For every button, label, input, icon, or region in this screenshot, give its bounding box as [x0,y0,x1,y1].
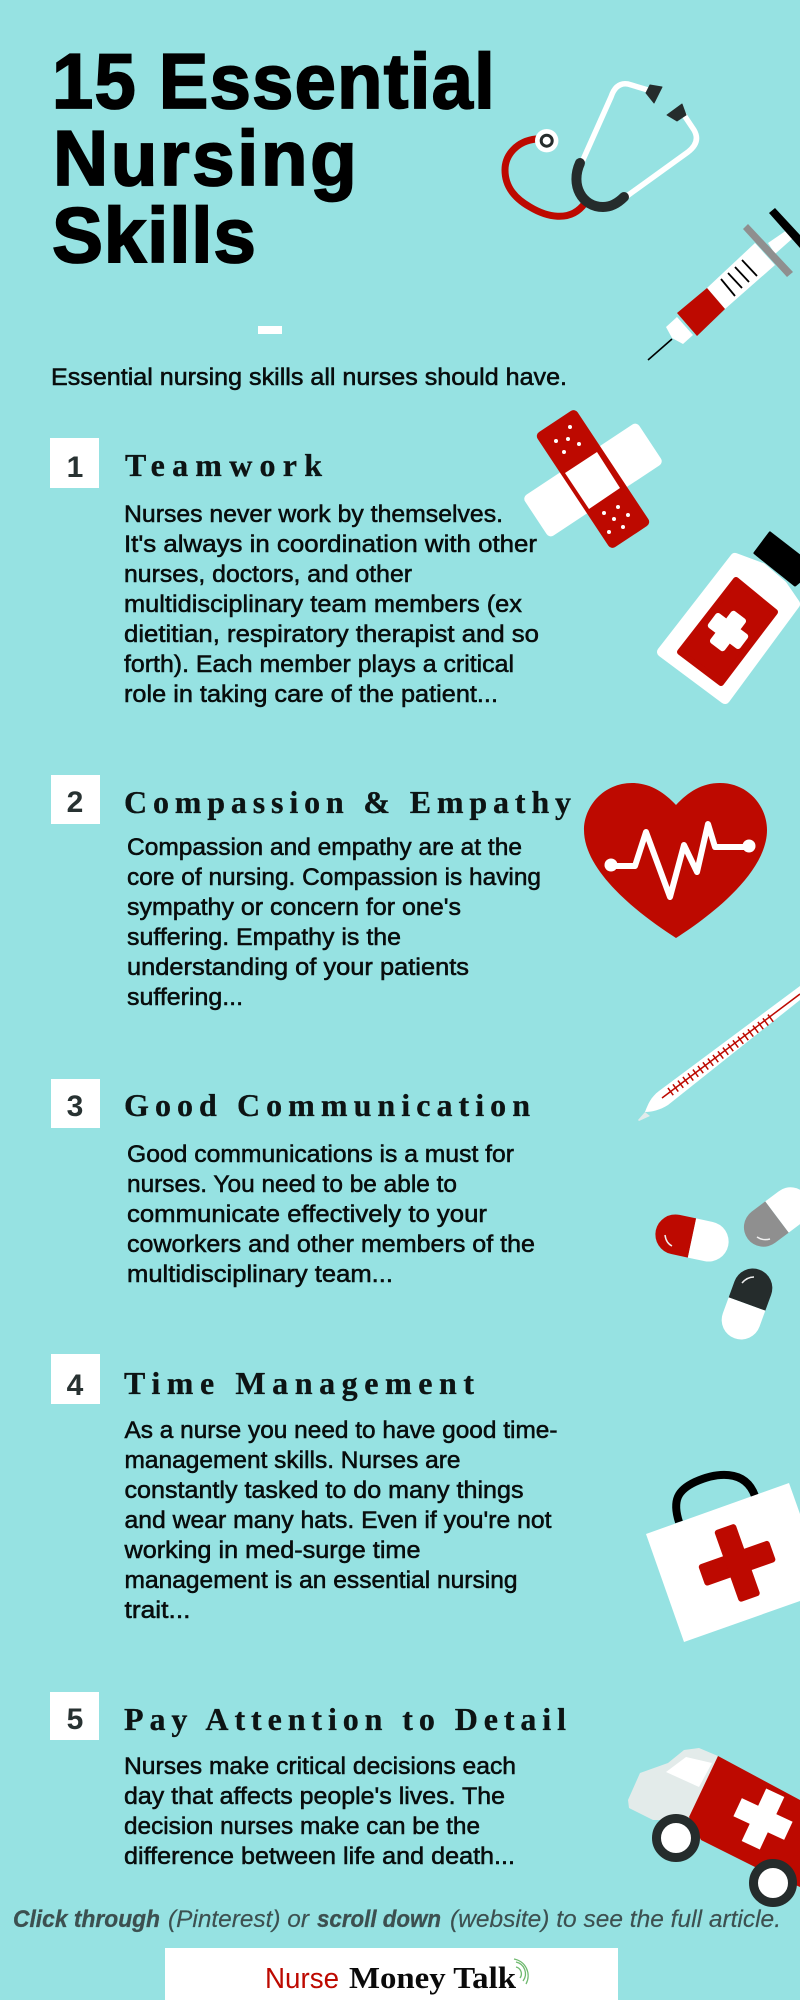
body 2: understanding of your patients [127,954,469,981]
call to action: scroll down [317,1906,441,1933]
body 1 [124,501,539,708]
body 3: nurses. You need to be able to [127,1171,457,1198]
icon: pills [652,1179,800,1345]
body 1: role in taking care of the patient... [124,681,498,708]
icon: heart with pulse [584,783,767,938]
number box 5 [50,1692,99,1740]
body 4: management is an essential nursing [124,1567,518,1594]
body 3: coworkers and other members of the [127,1231,535,1258]
body 4 [123,1417,558,1624]
logo: Nurse Money Talk: Nurse [265,1963,339,1995]
number 3: 3 [67,1090,83,1123]
panel: skill 2 [51,775,571,1011]
heading 5: Pay Attention to Detail [124,1701,566,1737]
body 4: trait... [124,1597,190,1624]
icon: syringe [648,208,800,360]
number 1: 1 [67,451,83,484]
panel: skill 5 [50,1692,566,1870]
title: Skills [52,192,256,279]
panel: skill 3 [51,1079,535,1288]
body 4: management skills. Nurses are [124,1447,460,1474]
icon: medicine bottle [662,533,800,699]
body 4: working in med-surge time [123,1537,421,1564]
body 3: multidisciplinary team... [127,1261,393,1288]
body 2: Compassion and empathy are at the [127,834,522,861]
icon: stethoscope [505,84,696,216]
body 1: Nurses never work by themselves. [124,501,503,528]
body 1: forth). Each member plays a critical [124,651,514,678]
call to action: (Pinterest) or [168,1906,310,1933]
call to action: (website) to see the full article. [450,1906,781,1933]
number box 3 [51,1079,100,1128]
body 1: multidisciplinary team members (ex [124,591,522,618]
body 2: suffering... [127,984,243,1011]
panel: skill 4 [51,1354,558,1624]
body 1: dietitian, respiratory therapist and so [124,621,539,648]
body 2: suffering. Empathy is the [127,924,401,951]
heading 1: Teamwork [125,447,322,483]
body 3: communicate effectively to your [127,1201,487,1228]
number 4: 4 [67,1369,84,1402]
body 5: Nurses make critical decisions each [124,1753,516,1780]
heading 3: Good Communication [124,1087,530,1123]
icon: first aid kit [646,1475,800,1642]
heading 2: Compassion & Empathy [124,784,571,820]
body 2: core of nursing. Compassion is having [127,864,541,891]
number 2: 2 [67,786,83,819]
logo: Nurse Money Talk: Money Talk [349,1960,517,1995]
number box 2 [51,775,100,824]
body 5: decision nurses make can be the [124,1813,480,1840]
number 5: 5 [67,1703,83,1736]
body 1: nurses, doctors, and other [124,561,412,588]
body 3 [127,1141,535,1288]
heading 4: Time Management [124,1365,474,1401]
call to action [13,1906,781,1933]
accent dash [258,326,282,334]
title [52,38,495,279]
body 4: As a nurse you need to have good time- [124,1417,558,1444]
title: 15 Essential [52,38,495,125]
panel: skill 1 [50,438,539,708]
subtitle: Essential nursing skills all nurses should have. [51,364,567,391]
body 2: sympathy or concern for one's [127,894,461,921]
icon: ambulance [628,1748,800,1902]
body 5 [124,1753,516,1870]
icon: thermometer [638,986,800,1121]
body 1: It's always in coordination with other [124,531,537,558]
logo: Nurse Money Talk [165,1948,618,2000]
number box 1 [50,438,99,488]
body 4: constantly tasked to do many things [124,1477,524,1504]
icon: bandage [522,408,664,550]
body 4: and wear many hats. Even if you're not [124,1507,552,1534]
number box 4 [51,1354,100,1404]
call to action: Click through [13,1906,160,1933]
body 5: difference between life and death... [124,1843,515,1870]
body 2 [127,834,541,1011]
body 3: Good communications is a must for [127,1141,514,1168]
body 5: day that affects people's lives. The [124,1783,505,1810]
title: Nursing [53,115,357,202]
